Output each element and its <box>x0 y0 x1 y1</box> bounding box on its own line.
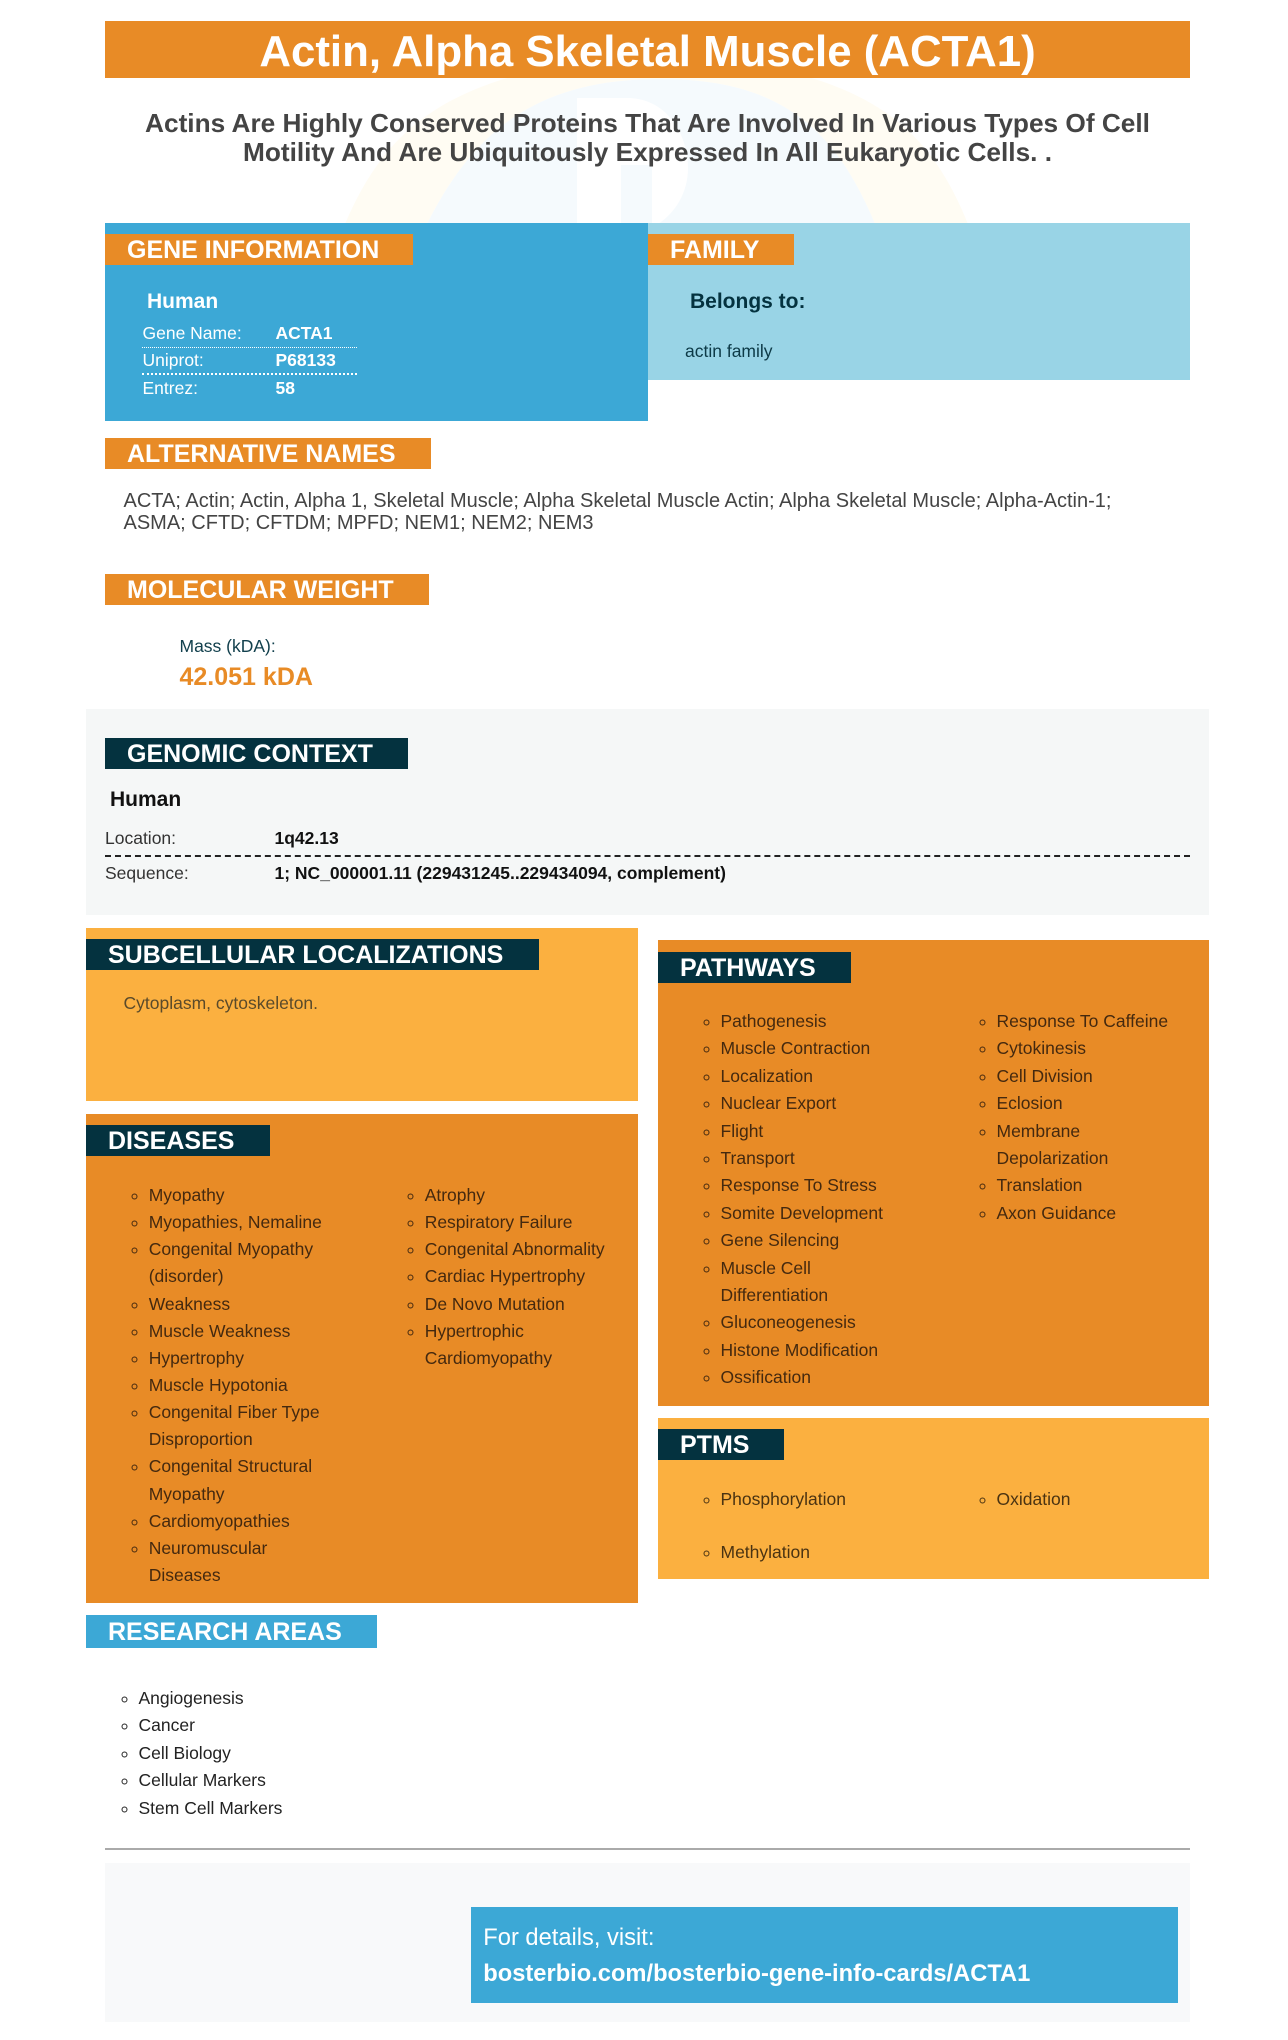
heading: research areas <box>86 1615 377 1648</box>
disease list column 2: De Novo Mutation <box>425 1294 565 1314</box>
disease list column 1 <box>132 1185 322 1585</box>
subtitle: Actins Are Highly Conserved Proteins That Are Involved In Various Types Of Cell <box>145 108 1150 138</box>
disease list column 1: Myopathy <box>149 1484 225 1504</box>
research areas list: Cellular Markers <box>138 1770 266 1790</box>
heading: pathways <box>658 952 851 983</box>
pathway list column 2: Eclosion <box>996 1093 1063 1113</box>
species label: Human <box>147 290 218 313</box>
disease list column 2: Congenital Abnormality <box>425 1239 605 1259</box>
pathway list column 1: Muscle Cell <box>720 1258 811 1278</box>
mass value: 42.051 kDA <box>180 663 313 691</box>
disease list column 2 <box>408 1185 605 1368</box>
disease list column 2: Respiratory Failure <box>425 1212 573 1232</box>
watermark logo <box>346 78 968 223</box>
disease list column 2: Hypertrophic <box>425 1321 524 1341</box>
title: Actin, Alpha Skeletal Muscle (ACTA1) <box>259 27 1036 76</box>
subtitle <box>145 108 1150 166</box>
ptm list column 1: Methylation <box>720 1542 810 1562</box>
heading: ptms <box>658 1429 784 1460</box>
pathway list column 1: Flight <box>720 1121 763 1141</box>
subtitle: Motility And Are Ubiquitously Expressed In All Eukaryotic Cells. . <box>243 136 1052 166</box>
disease list column 1: Myopathy <box>149 1185 225 1205</box>
family value: actin family <box>685 340 773 360</box>
pathway list column 1: Localization <box>720 1066 813 1086</box>
pathway list column 1: Response To Stress <box>720 1175 877 1195</box>
alternative names text <box>124 490 1111 534</box>
heading: family <box>648 234 794 265</box>
ptm list column 2: Oxidation <box>996 1489 1070 1509</box>
heading: diseases <box>86 1125 270 1156</box>
panel: pathways <box>658 940 1209 1406</box>
callout label: For details, visit: <box>483 1925 654 1951</box>
panel: diseases <box>86 1114 638 1603</box>
panel: family <box>648 223 1190 380</box>
heading: molecular weight: MOLECULAR WEIGHT <box>127 576 394 604</box>
section: alternative names <box>105 438 1111 534</box>
section: molecular weight <box>105 574 429 691</box>
disease list column 1: (disorder) <box>149 1266 224 1286</box>
disease list column 1: Weakness <box>149 1294 230 1314</box>
callout url: bosterbio.com/bosterbio-gene-info-cards/ACTA1 <box>483 1961 1030 1987</box>
footer panel <box>105 1863 1190 2022</box>
pathway list column 1 <box>704 1011 883 1387</box>
gene name row: ACTA1 <box>276 322 333 342</box>
alternative names text: ACTA; Actin; Actin, Alpha 1, Skeletal Muscle; Alpha Skeletal Muscle Actin; Alpha Skeletal Muscle; Alpha-Actin-1; <box>124 490 1111 512</box>
heading: subcellular localizations: SUBCELLULAR LOCALIZATIONS <box>108 941 503 969</box>
pathway list column 2: Axon Guidance <box>996 1203 1116 1223</box>
pathway list column 2: Cytokinesis <box>996 1038 1086 1058</box>
pathway list column 2: Translation <box>996 1175 1082 1195</box>
pathway list column 2: Cell Division <box>996 1066 1093 1086</box>
heading: diseases: DISEASES <box>108 1127 234 1155</box>
location row <box>105 828 339 848</box>
ptm list column 1 <box>704 1489 846 1562</box>
sequence row: Sequence: <box>105 863 189 883</box>
entrez row: Entrez: <box>142 378 198 398</box>
localization text: Cytoplasm, cytoskeleton. <box>124 993 318 1013</box>
disease list column 1: Congenital Fiber Type <box>149 1402 320 1422</box>
disease list column 2: Atrophy <box>425 1185 485 1205</box>
disease list column 1: Myopathies, Nemaline <box>149 1212 322 1232</box>
pathway list column 1: Gluconeogenesis <box>720 1312 856 1332</box>
research areas list: Stem Cell Markers <box>138 1798 282 1818</box>
research areas list: Cancer <box>138 1715 195 1735</box>
pathway list column 1: Nuclear Export <box>720 1093 836 1113</box>
location row: 1q42.13 <box>274 828 339 848</box>
disease list column 1: Diseases <box>149 1565 221 1585</box>
research areas list: Cell Biology <box>138 1743 231 1763</box>
disease list column 1: Neuromuscular <box>149 1538 267 1558</box>
panel: gene information <box>105 223 648 421</box>
species label: Human <box>110 788 181 810</box>
mass label: Mass (kDA): <box>180 636 276 656</box>
disease list column 1: Congenital Myopathy <box>149 1239 313 1259</box>
gene name row <box>142 322 333 342</box>
panel: ptms <box>658 1418 1209 1579</box>
heading: pathways: PATHWAYS <box>680 954 816 982</box>
pathway list column 1: Gene Silencing <box>720 1230 839 1250</box>
pathway list column 1: Ossification <box>720 1367 811 1387</box>
heading: family: FAMILY <box>670 236 759 264</box>
disease list column 1: Hypertrophy <box>149 1348 244 1368</box>
pathway list column 2: Depolarization <box>996 1148 1108 1168</box>
heading: gene information: GENE INFORMATION <box>127 236 379 264</box>
disease list column 2: Cardiomyopathy <box>425 1348 552 1368</box>
heading: ptms: PTMS <box>680 1431 749 1459</box>
disease list column 1: Cardiomyopathies <box>149 1511 290 1531</box>
pathway list column 1: Somite Development <box>720 1203 883 1223</box>
heading: alternative names: ALTERNATIVE NAMES <box>127 440 396 468</box>
title <box>105 21 1190 78</box>
pathway list column 1: Differentiation <box>720 1285 828 1305</box>
alternative names text: ASMA; CFTD; CFTDM; MPFD; NEM1; NEM2; NEM3 <box>124 512 594 534</box>
pathway list column 2: Response To Caffeine <box>996 1011 1168 1031</box>
disease list column 1: Disproportion <box>149 1429 253 1449</box>
pathway list column 1: Pathogenesis <box>720 1011 827 1031</box>
sequence row: 1; NC_000001.11 (229431245..229434094, complement) <box>274 863 726 883</box>
pathway list column 1: Muscle Contraction <box>720 1038 870 1058</box>
disease list column 2: Cardiac Hypertrophy <box>425 1266 585 1286</box>
heading: genomic context: GENOMIC CONTEXT <box>127 740 373 768</box>
gene name row: Gene Name: <box>142 322 242 342</box>
callout: details link <box>471 1907 1178 2003</box>
disease list column 1: Muscle Hypotonia <box>149 1375 288 1395</box>
uniprot row: P68133 <box>276 350 336 370</box>
heading: research areas: RESEARCH AREAS <box>108 1618 342 1646</box>
entrez row <box>142 378 295 398</box>
section: research areas <box>86 1615 377 1818</box>
location row: Location: <box>105 828 176 848</box>
panel: subcellular localizations <box>86 928 638 1101</box>
ptm list column 1: Phosphorylation <box>720 1489 846 1509</box>
disease list column 1: Congenital Structural <box>149 1456 312 1476</box>
pathway list column 1: Histone Modification <box>720 1340 878 1360</box>
research areas list <box>122 1688 282 1818</box>
pathway list column 1: Transport <box>720 1148 795 1168</box>
panel: genomic context <box>86 709 1209 915</box>
belongs to label: Belongs to: <box>690 290 806 313</box>
uniprot row <box>142 350 336 370</box>
entrez row: 58 <box>276 378 295 398</box>
pathway list column 2 <box>980 1011 1168 1223</box>
uniprot row: Uniprot: <box>142 350 204 370</box>
pathway list column 2: Membrane <box>996 1121 1080 1141</box>
disease list column 1: Muscle Weakness <box>149 1321 290 1341</box>
research areas list: Angiogenesis <box>138 1688 244 1708</box>
